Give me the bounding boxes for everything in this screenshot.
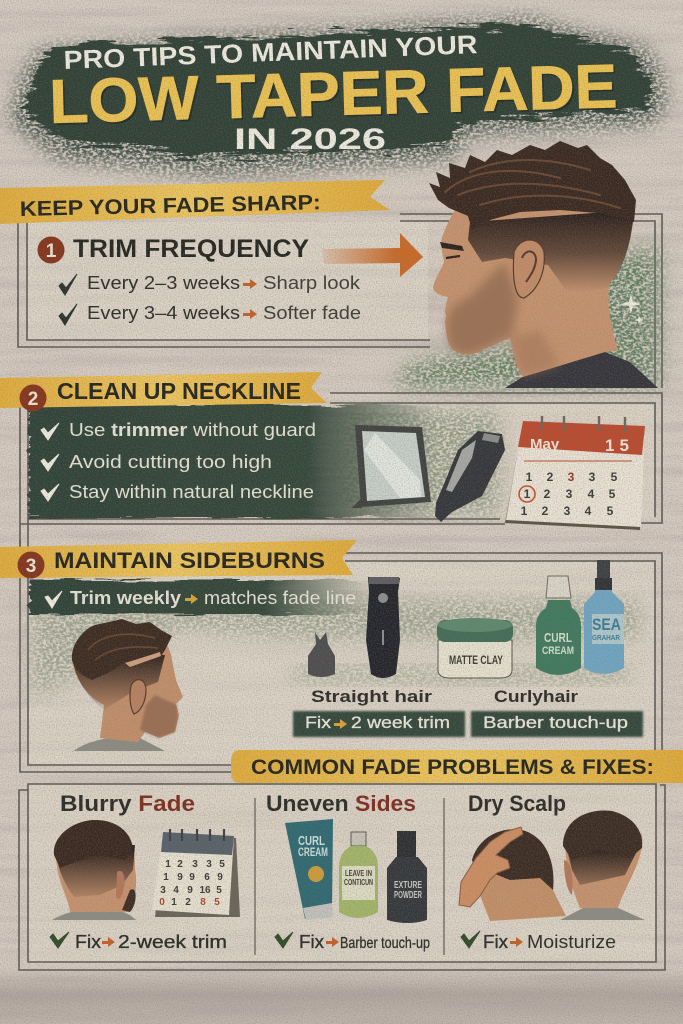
- tip: every 2-3 weeks: Sharp look: [263, 273, 361, 293]
- fix: moisturize: Fix: [483, 932, 508, 952]
- icon: calendar: [152, 829, 240, 917]
- fix: barber touch-up: Fix: [299, 932, 324, 952]
- heading: blurry fade: Blurry Fade: [60, 791, 195, 816]
- icon: calendar May 15: 3: [589, 470, 596, 484]
- tip: every 3-4 weeks: Every 3–4 weeks: [87, 303, 240, 323]
- icon: calendar: 9: [187, 885, 193, 896]
- icon: texture powder: [387, 831, 427, 923]
- number badge 1: [38, 236, 64, 264]
- fix: moisturize: [461, 931, 616, 952]
- panel: trim frequency frame: [18, 214, 662, 388]
- fix: 2-week trim: 2-week trim: [118, 932, 227, 952]
- tip: trim weekly: [45, 588, 356, 608]
- column: blurry fade: [50, 791, 240, 952]
- panel: common problems frame: [19, 784, 665, 970]
- ear: [513, 240, 544, 298]
- icon: curl cream bottle: CREAM: [542, 645, 574, 657]
- shirt: [505, 352, 658, 388]
- sparkles: [621, 294, 644, 325]
- icon: calendar May 15: 2: [544, 487, 551, 501]
- ribbon: maintain sideburns: [0, 540, 357, 578]
- green wash around clean up tools: [340, 410, 500, 515]
- hair type labels: [311, 687, 578, 706]
- icon: clipper: [435, 431, 505, 522]
- column divider: [255, 798, 444, 955]
- dark band behind sideburn tip: [29, 580, 374, 614]
- heading: trim frequency: TRIM FREQUENCY: [73, 235, 309, 263]
- icon: calendar May 15: 4: [588, 487, 595, 501]
- title brush grit: [8, 18, 668, 175]
- icon: calendar May 15: May: [530, 436, 560, 453]
- icon: calendar: 4: [173, 885, 179, 896]
- icon: calendar: 9: [217, 872, 223, 883]
- column: dry scalp: [459, 791, 645, 952]
- tag: curly hair fix: Barber touch-up: [483, 713, 628, 732]
- icon: calendar: 3: [192, 859, 198, 870]
- icon: calendar May 15: 1: [526, 470, 533, 484]
- title line: low taper fade: LOW TAPER FADE: [51, 54, 620, 139]
- illustration: back of head, dry scalp: [560, 810, 645, 920]
- fix: 2-week trim: [50, 932, 227, 952]
- panel: clean up neckline frame: [20, 393, 662, 560]
- tip: every 2-3 weeks: Every 2–3 weeks: [87, 273, 240, 293]
- icon: calendar May 15: 15: [605, 436, 629, 455]
- icon: calendar: 2: [177, 859, 183, 870]
- icon: calendar May 15: 4: [585, 504, 592, 518]
- title line: pro tips: PRO TIPS TO MAINTAIN YOUR: [63, 29, 478, 75]
- icon: trimmer: [366, 577, 400, 678]
- icon: calendar: 6: [204, 872, 210, 883]
- neckline tips: [41, 420, 316, 502]
- ribbon: keep your fade sharp: [0, 180, 390, 224]
- icon: calendar: 1: [163, 872, 169, 883]
- dark band behind neckline tips: [29, 405, 439, 518]
- icon: calendar: 0: [159, 897, 165, 908]
- icon: sea salt bottle: GRAHAR: [592, 635, 620, 642]
- number badge 2: [20, 384, 46, 412]
- heading: dry scalp: Dry Scalp: [468, 791, 566, 816]
- hair type labels: Curlyhair: [494, 687, 578, 706]
- icon: leave in conditioner: [339, 832, 378, 918]
- hair: [429, 141, 636, 230]
- ribbon: clean up neckline: [0, 372, 327, 412]
- beard shadow: [447, 262, 518, 354]
- tag: straight hair fix: 2 week trim: [351, 713, 450, 732]
- icon: leave in conditioner: CONTICUN: [344, 878, 373, 887]
- icon: calendar: 2: [185, 897, 191, 908]
- icon: calendar May 15: 5: [611, 470, 618, 484]
- icon: calendar May 15: 3: [564, 504, 571, 518]
- icon: sea salt bottle: [584, 560, 624, 674]
- number badge 1: 1: [46, 241, 57, 262]
- icon: calendar: 8: [200, 897, 206, 908]
- icon: sea salt bottle: SEA: [592, 615, 621, 634]
- neck shadow: [510, 330, 560, 377]
- green base under tools: [290, 665, 630, 685]
- fix: moisturize: Moisturize: [527, 932, 616, 952]
- title line: low taper fade: LOW TAPER FADE: [48, 52, 618, 137]
- ribbon: clean up neckline: CLEAN UP NECKLINE: [57, 378, 301, 404]
- green wash around products: [30, 600, 640, 700]
- tip: avoid cutting too high: Avoid cutting too high: [69, 452, 272, 472]
- icon: curl cream bottle: [536, 576, 581, 675]
- tip: use trimmer: Use trimmer without guard: [69, 420, 316, 440]
- heading: uneven sides: Uneven Sides: [266, 791, 416, 816]
- icon: curl cream tube: CREAM: [298, 845, 328, 859]
- icon: curl cream tube: [285, 819, 333, 920]
- illustration: man side view, sideburns: [72, 619, 183, 752]
- icon: leave in conditioner: LEAVE IN: [345, 869, 372, 878]
- icon: curl cream tube: CURL: [298, 833, 325, 848]
- icon: calendar: 3: [206, 859, 212, 870]
- title brush stroke: [24, 25, 650, 157]
- icon: calendar May 15: 1: [521, 504, 528, 518]
- icon: calendar: 9: [177, 872, 183, 883]
- title: [48, 29, 620, 156]
- tip: stay within neckline: Stay within natural neckline: [69, 482, 314, 502]
- ribbon: keep your fade sharp: KEEP YOUR FADE SHARP:: [20, 191, 321, 221]
- calendar rings: [542, 416, 625, 432]
- ribbon: maintain sideburns: MAINTAIN SIDEBURNS: [54, 548, 325, 573]
- tag: curly hair fix: [471, 711, 643, 737]
- hair type labels: Straight hair: [311, 687, 432, 706]
- tip: every 3-4 weeks: [59, 303, 361, 325]
- icon: mirror: [354, 425, 431, 507]
- tip: trim weekly: Trim weekly: [70, 588, 181, 608]
- tag: straight hair fix: [293, 711, 465, 737]
- icon: calendar: 16: [199, 885, 211, 896]
- brow and eye: [440, 242, 464, 258]
- icon: calendar May 15: 3: [566, 487, 573, 501]
- icon: calendar May 15: [505, 416, 645, 530]
- icon: calendar May 15: 5: [609, 487, 616, 501]
- icon: matte clay jar: [437, 618, 513, 678]
- column: uneven sides: [266, 791, 430, 952]
- ribbon: common fade problems: [231, 750, 683, 783]
- icon: matte clay jar: MATTE CLAY: [449, 653, 503, 667]
- tip: trim weekly: matches fade line: [204, 588, 356, 608]
- icon: texture powder: EXTURE: [394, 880, 422, 891]
- icon: calendar May 15: 2: [542, 504, 549, 518]
- title line: in 2026: IN 2026: [234, 123, 386, 156]
- light panel interiors: [28, 222, 656, 962]
- icon: calendar: 5: [214, 897, 220, 908]
- icon: trimmer attachment: [308, 632, 335, 677]
- icon: calendar: 5: [219, 859, 225, 870]
- illustration: man profile with low taper fade: [429, 141, 658, 388]
- icon: calendar May 15: 3: [568, 470, 575, 484]
- section: trim frequency: [38, 233, 423, 325]
- icon: calendar: 3: [160, 885, 166, 896]
- fix: barber touch-up: [275, 932, 430, 952]
- number badge 3: [18, 552, 44, 578]
- panel: maintain sideburns frame: [20, 540, 662, 772]
- tip: every 3-4 weeks: Softer fade: [263, 303, 361, 323]
- illustration: back of head: [52, 820, 136, 920]
- tip: every 2-3 weeks: [59, 273, 361, 295]
- icon: calendar: 5: [216, 885, 222, 896]
- icon: calendar: 1: [171, 897, 177, 908]
- icon: curl cream bottle: CURL: [544, 630, 572, 645]
- icon: calendar May 15: 1: [524, 487, 531, 501]
- fade shading: [468, 210, 634, 296]
- fix: barber touch-up: Barber touch-up: [340, 935, 430, 952]
- icon: calendar May 15: 5: [607, 504, 614, 518]
- number badge 2: 2: [28, 389, 38, 410]
- neck and face: [433, 170, 632, 377]
- light interior behind clean up tools: [420, 405, 654, 517]
- ribbon: common fade problems: COMMON FADE PROBLEMS & FIXES:: [251, 756, 654, 779]
- green wash behind man: [390, 245, 660, 388]
- icon: calendar May 15: 2: [547, 470, 554, 484]
- tag: straight hair fix: Fix: [305, 713, 332, 732]
- fix: 2-week trim: Fix: [75, 932, 101, 952]
- illustration: head with hand: [459, 827, 566, 921]
- number badge 3: 3: [26, 556, 36, 577]
- arrow to man: [322, 233, 423, 277]
- icon: texture powder: POWDER: [394, 890, 422, 901]
- icon: calendar: 9: [189, 872, 195, 883]
- icon: calendar: 1: [165, 859, 171, 870]
